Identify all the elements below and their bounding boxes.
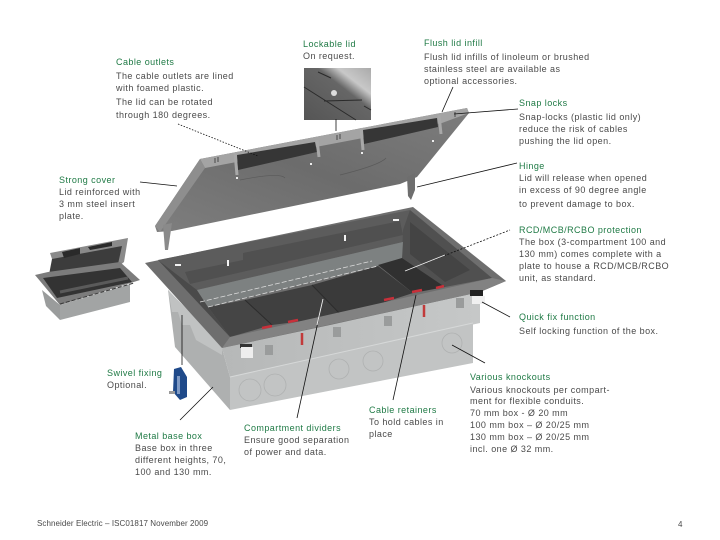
text: metal base box: 100 and 130 mm.	[135, 467, 212, 477]
leader: lockable lid	[335, 119, 337, 131]
text: hinge: in excess of 90 degree angle	[519, 185, 647, 195]
text: swivel fixing: Swivel fixing	[107, 368, 162, 378]
text: various knockouts	[470, 372, 610, 454]
text: flush lid infill: Flush lid infills of linoleum or brushed	[424, 52, 590, 62]
footer source line: Schneider Electric – ISC01817 November 2009	[37, 519, 209, 528]
back wall	[158, 210, 410, 290]
illustration: swivel fixing bracket	[169, 367, 187, 400]
text: quick fix function: Self locking function of the box.	[519, 326, 658, 336]
text: flush lid infill: optional accessories.	[424, 76, 518, 86]
text: RCD protection: 130 mm) comes complete with a	[519, 249, 662, 259]
left inner wall	[158, 260, 230, 337]
upper front band	[222, 290, 480, 377]
slots on front band	[265, 298, 464, 355]
illustration: floor box	[145, 207, 506, 410]
leader: hinge	[417, 163, 517, 187]
leader: strong cover	[140, 182, 177, 186]
text: cable outlets: Cable outlets	[116, 57, 174, 67]
text: RCD protection: RCD/MCB/RCBO protection	[519, 225, 642, 235]
leader: various knockouts	[452, 345, 485, 363]
text: snap locks: reduce the risk of cables	[519, 124, 628, 134]
text: hinge	[519, 161, 647, 209]
leader: cable retainers	[393, 295, 416, 400]
text: various knockouts: Various knockouts per compart-	[470, 385, 610, 395]
text: cable outlets: The lid can be rotated	[116, 97, 213, 107]
front clip	[240, 344, 253, 358]
snap lock right	[363, 118, 438, 144]
lower front band	[230, 323, 473, 410]
dashed strip highlights	[200, 261, 378, 307]
leader: swivel fixing	[181, 315, 183, 365]
leader: snap locks	[454, 109, 518, 114]
text: quick fix function	[519, 312, 658, 336]
text: various knockouts: 100 mm box – Ø 20/25 mm	[470, 420, 589, 430]
text: various knockouts: ment for flexible conduits.	[470, 396, 584, 406]
lid hinge right	[407, 173, 415, 200]
RCD plate	[378, 258, 445, 293]
text: various knockouts: Various knockouts	[470, 372, 551, 382]
leader: compartment dividers	[297, 299, 323, 418]
text: strong cover	[59, 175, 141, 221]
text: strong cover: Strong cover	[59, 175, 115, 185]
metal base box left side	[168, 290, 230, 410]
snap lock left	[237, 142, 317, 170]
text: cable outlets: The cable outlets are lined	[116, 71, 234, 81]
text: cable retainers: Cable retainers	[369, 405, 437, 415]
leader highlights over dark areas	[317, 255, 445, 325]
text: RCD protection	[519, 225, 669, 283]
front flange ledge	[222, 278, 506, 348]
right inner wall	[402, 210, 492, 287]
leader: RCD protection	[405, 230, 510, 271]
text: metal base box: different heights, 70,	[135, 455, 226, 465]
text: flush lid infill: stainless steel are available as	[424, 64, 561, 74]
metal strip	[197, 242, 403, 307]
text: lockable lid: On request.	[303, 51, 355, 61]
text: swivel fixing	[107, 368, 162, 390]
text: compartment dividers: Ensure good separation	[244, 435, 349, 445]
quick fix clip	[470, 290, 485, 304]
text: snap locks: pushing the lid open.	[519, 136, 612, 146]
text: metal base box	[135, 431, 226, 477]
text: cable outlets: through 180 degrees.	[116, 110, 211, 120]
leader: metal base box	[180, 387, 213, 420]
text: hinge: to prevent damage to box.	[519, 199, 635, 209]
compartments	[208, 300, 272, 337]
text: cable outlets	[115, 57, 234, 120]
text: snap locks: Snap-locks (plastic lid only)	[519, 112, 641, 122]
leader: quick fix	[482, 302, 510, 317]
leader lines	[140, 87, 518, 420]
text: compartment dividers	[244, 423, 349, 457]
text: lockable lid	[303, 39, 356, 61]
text: snap locks	[519, 98, 641, 146]
illustration: lockable lid detail photo	[304, 68, 371, 120]
red cable retainers	[262, 286, 444, 328]
text: hinge: Lid will release when opened	[519, 173, 647, 183]
text: cable retainers: To hold cables in	[369, 417, 444, 427]
text: lockable lid: Lockable lid	[303, 39, 356, 49]
text: strong cover: plate.	[59, 211, 84, 221]
text: strong cover: Lid reinforced with	[59, 187, 141, 197]
text: RCD protection: unit, as standard.	[519, 273, 596, 283]
knockouts	[239, 333, 462, 401]
text: swivel fixing: Optional.	[107, 380, 147, 390]
illustration: small open product photo	[35, 238, 140, 320]
lid hinge left	[163, 223, 172, 250]
text: flush lid infill: Flush lid infill	[424, 38, 483, 48]
text: snap locks: Snap locks	[519, 98, 568, 108]
text: strong cover: 3 mm steel insert	[59, 199, 135, 209]
red indicators	[302, 305, 424, 345]
text: various knockouts: incl. one Ø 32 mm.	[470, 444, 554, 454]
text: metal base box: Base box in three	[135, 443, 213, 453]
text: flush lid infill	[424, 38, 590, 86]
text: RCD protection: The box (3-compartment 100 and	[519, 237, 666, 247]
text: various knockouts: 130 mm box – Ø 20/25 mm	[470, 432, 589, 442]
text: hinge: Hinge	[519, 161, 545, 171]
text: quick fix function: Quick fix function	[519, 312, 596, 322]
text: cable outlets: with foamed plastic.	[115, 83, 204, 93]
text: various knockouts: 70 mm box - Ø 20 mm	[470, 408, 568, 418]
text: cable retainers: place	[369, 429, 393, 439]
leader: flush lid infill	[442, 87, 453, 112]
flange	[145, 207, 506, 348]
text: cable retainers	[369, 405, 444, 439]
text: compartment dividers: of power and data.	[244, 447, 327, 457]
text: RCD protection: plate to house a RCD/MCB/RCBO	[519, 261, 669, 271]
illustration: open hinged lid	[155, 108, 469, 250]
white pins	[175, 220, 399, 266]
text: metal base box: Metal base box	[135, 431, 202, 441]
leader: cable outlets	[178, 124, 258, 156]
page number: 4	[678, 520, 683, 529]
text: compartment dividers: Compartment dividers	[244, 423, 341, 433]
